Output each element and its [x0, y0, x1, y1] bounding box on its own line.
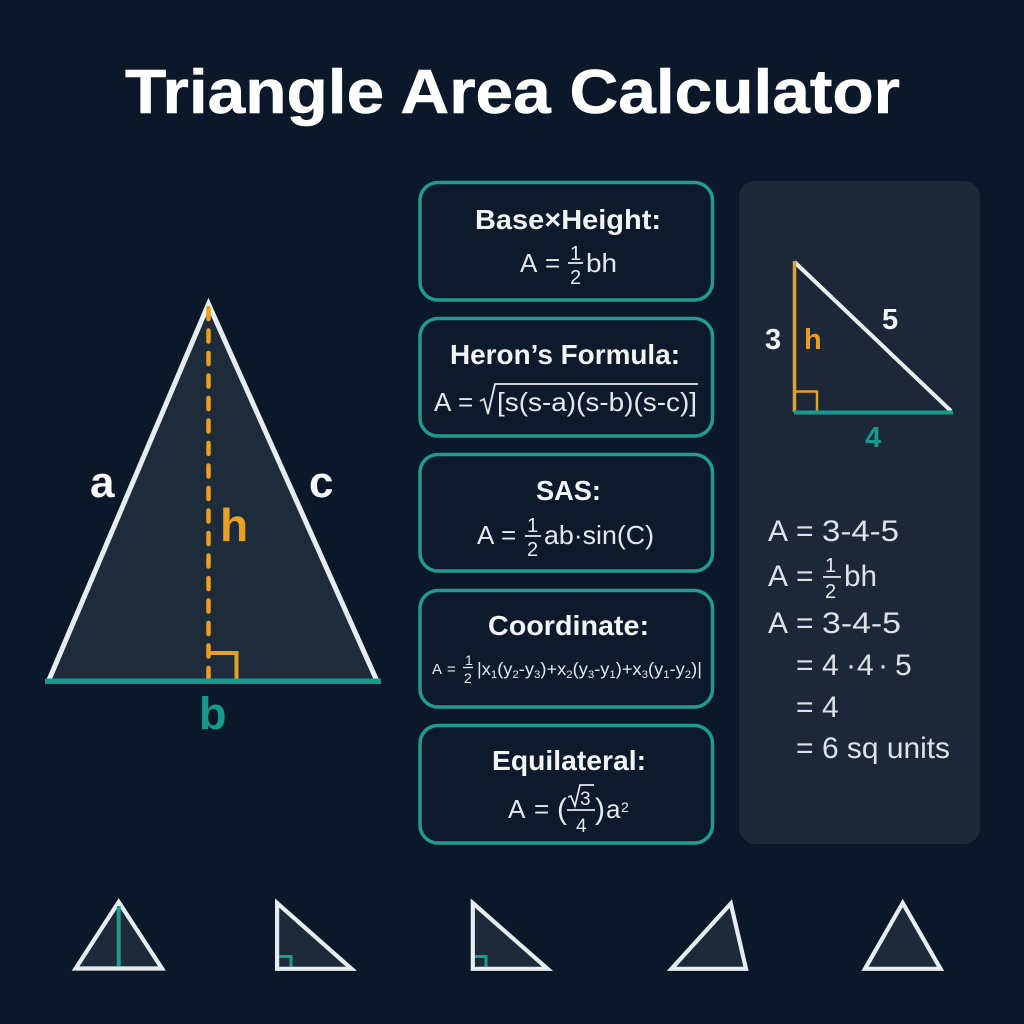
formula: 3 — [588, 669, 594, 681]
formula — [432, 652, 702, 686]
formula: 2 — [570, 267, 581, 289]
formula: 2 — [512, 669, 519, 681]
formula: 1 — [570, 243, 581, 265]
heading: Equilateral: — [492, 745, 646, 776]
icon: triangle with altitude — [76, 902, 162, 968]
base line b — [45, 678, 381, 684]
panel: heron's formula — [420, 318, 712, 436]
formula — [508, 785, 629, 837]
label h: h — [804, 324, 822, 356]
formula: 1 — [465, 652, 473, 668]
formula: a — [606, 794, 621, 824]
worked calculation: 3-4-5 — [822, 515, 899, 548]
icon: right triangle two — [473, 903, 548, 969]
formula: 2 — [464, 670, 472, 686]
worked calculation: 2 — [825, 581, 836, 603]
formula: 2 — [685, 669, 691, 681]
panel: base times height — [420, 182, 712, 300]
formula: 1 — [527, 515, 538, 537]
worked calculation: = — [796, 607, 814, 640]
worked calculation: = — [796, 691, 814, 724]
label 5: 5 — [882, 304, 898, 336]
formula: 2 — [621, 799, 629, 815]
heading: SAS: — [536, 475, 601, 506]
worked calculation: 4 — [857, 649, 874, 682]
label b: b — [199, 688, 226, 739]
worked calculation: · — [846, 649, 856, 682]
formula: = — [545, 248, 560, 278]
label a: a — [90, 458, 115, 507]
panel: coordinate — [420, 590, 712, 707]
worked calculation: 6 sq units — [822, 732, 950, 765]
heading: Base×Height: — [475, 204, 661, 235]
formula: 3 — [642, 669, 648, 681]
label h: h — [220, 499, 248, 551]
worked calculation: 4 — [822, 691, 839, 724]
worked calculation: = — [796, 732, 814, 765]
formula: ab·sin(C) — [544, 520, 654, 550]
formula: A — [520, 248, 538, 278]
formula: 3 — [580, 789, 591, 810]
formula — [520, 243, 617, 289]
formula: A — [432, 661, 442, 678]
formula: )+x — [540, 659, 566, 679]
formula: 1 — [491, 669, 497, 681]
panel: equilateral — [420, 726, 712, 843]
worked calculation: 4 — [822, 649, 839, 682]
main triangle diagram — [45, 304, 381, 739]
right angle marker — [208, 653, 236, 679]
worked calculation: 1 — [825, 555, 836, 577]
formula — [477, 515, 654, 561]
formula: |x — [477, 659, 490, 679]
example right triangle — [765, 261, 953, 454]
formula: = — [534, 794, 549, 824]
worked calculation: = — [796, 515, 814, 548]
formula: 1 — [609, 669, 616, 681]
formula: = — [501, 520, 516, 550]
panel: worked example — [739, 181, 980, 844]
formula: 4 — [576, 816, 587, 837]
worked calculation: = — [796, 649, 814, 682]
formula — [434, 384, 698, 417]
formula: 2 — [527, 539, 538, 561]
worked calculation: A — [768, 607, 788, 640]
formula: A — [508, 794, 526, 824]
icon: right triangle — [277, 903, 352, 969]
label 3: 3 — [765, 324, 781, 356]
formula: (y — [497, 659, 513, 679]
worked calculation — [768, 515, 950, 765]
formula: bh — [586, 248, 617, 278]
formula: (y — [573, 659, 588, 679]
worked calculation: bh — [844, 560, 877, 593]
worked calculation: A — [768, 560, 788, 593]
formula: = — [447, 661, 456, 678]
worked calculation: 5 — [895, 649, 912, 682]
triangle body — [48, 304, 377, 681]
formula: A — [434, 387, 452, 417]
formula: 3 — [534, 669, 540, 681]
formula: )| — [691, 659, 702, 679]
worked calculation: 3-4-5 — [822, 607, 901, 640]
formula: [s(s-a)(s-b)(s-c)] — [497, 387, 697, 417]
formula: -y — [670, 659, 685, 679]
formula: ) — [595, 793, 605, 826]
worked calculation: A — [768, 515, 788, 548]
worked calculation: = — [796, 560, 814, 593]
formula: )+x — [616, 659, 642, 679]
label c: c — [309, 458, 333, 507]
label 4: 4 — [865, 422, 881, 454]
formula: = — [458, 387, 473, 417]
formula: A — [477, 520, 495, 550]
height dashed line — [206, 308, 211, 679]
formula: -y — [594, 659, 610, 679]
formula: ( — [557, 793, 567, 826]
icon: scalene triangle — [672, 904, 746, 969]
heading: Coordinate: — [488, 610, 649, 641]
worked calculation: · — [878, 649, 888, 682]
formula: 1 — [663, 669, 670, 681]
formula: -y — [519, 659, 534, 679]
panel: SAS — [420, 454, 712, 571]
formula: 2 — [566, 669, 573, 681]
title: Triangle Area Calculator — [125, 58, 900, 127]
heading: Heron’s Formula: — [450, 339, 680, 370]
formula: (y — [648, 659, 663, 679]
icon: equilateral triangle — [865, 903, 940, 969]
